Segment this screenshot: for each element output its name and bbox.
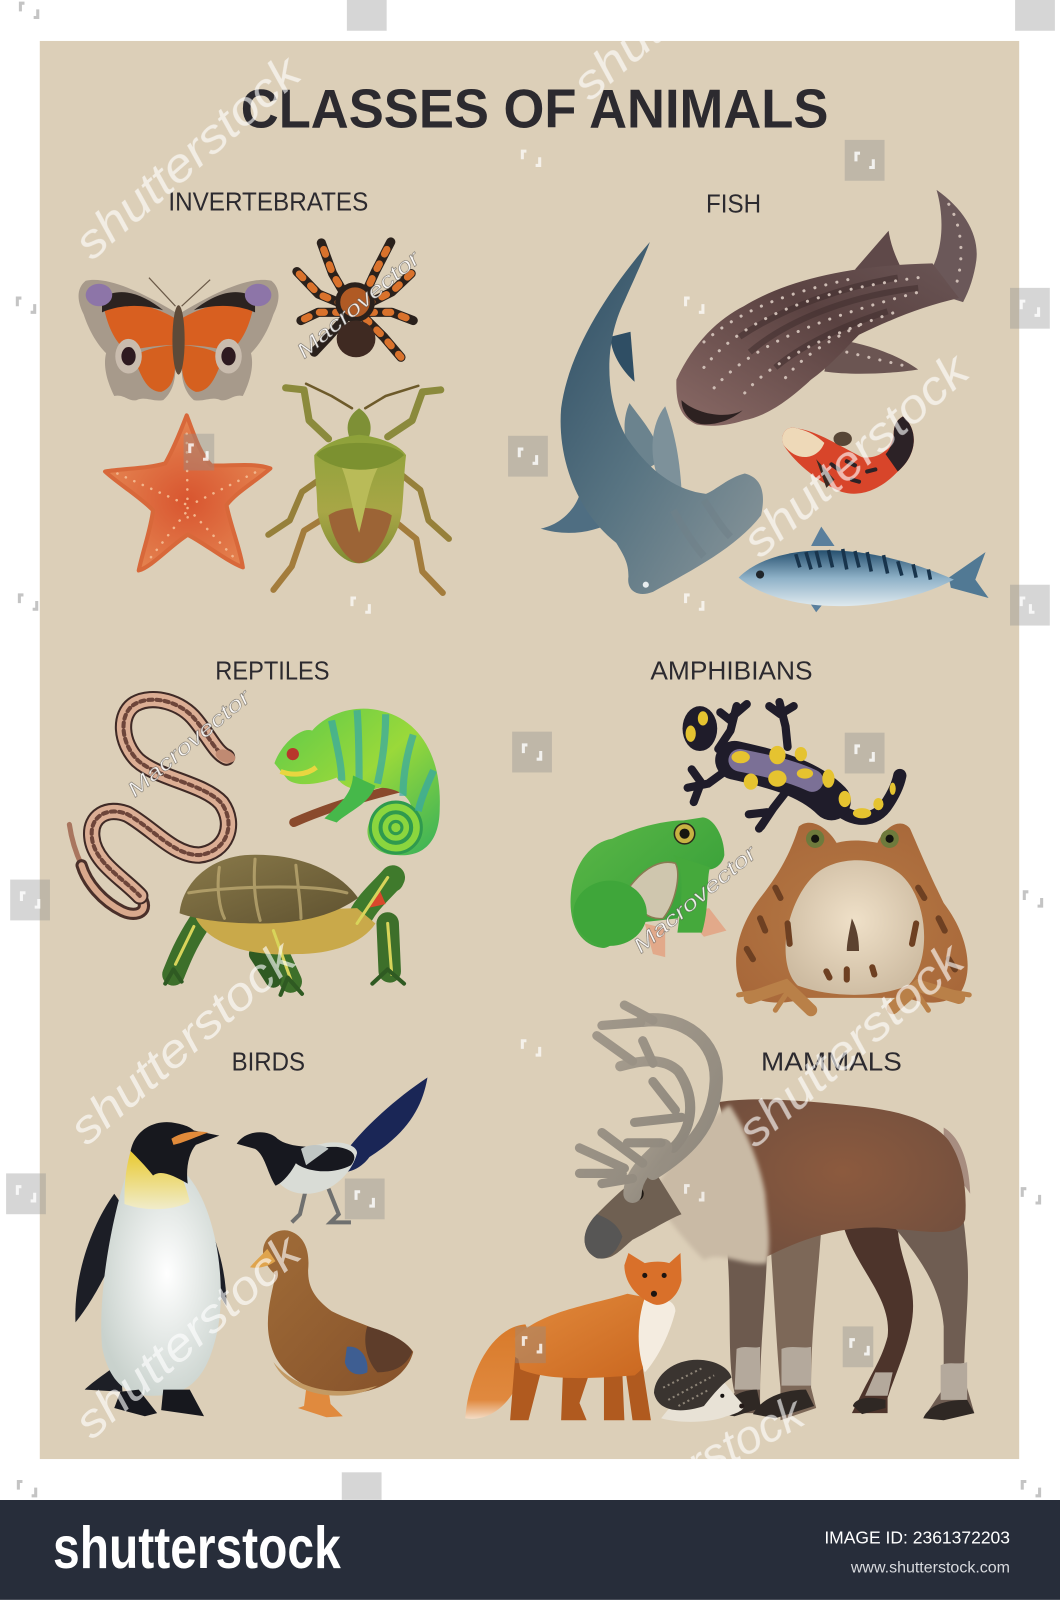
icon: tarantula <box>297 242 413 357</box>
front legs <box>719 1240 767 1413</box>
icon: koi fish <box>782 416 914 494</box>
heading: birds: BIRDS <box>232 1048 305 1076</box>
watermark: shutterstock diagonals: shutterstock <box>59 929 307 1154</box>
socks <box>735 1347 967 1400</box>
icon: butterfly <box>79 278 279 401</box>
icon: whale shark <box>676 190 977 426</box>
footer logo: shutterstock <box>53 1514 341 1581</box>
icon: mackerel <box>739 527 989 612</box>
heading: invertebrates: INVERTEBRATES <box>168 188 368 216</box>
icon: chameleon <box>274 709 440 855</box>
near rear leg <box>888 1173 974 1418</box>
watermark: macrovector diagonals: Macrovector <box>628 840 762 958</box>
footer image id: IMAGE ID: 2361372203 <box>824 1528 1010 1548</box>
watermark: shutterstock diagonals: shutterstock <box>727 931 975 1156</box>
watermark: macrovector diagonals: Macrovector <box>122 684 256 802</box>
icon: magpie <box>237 1077 427 1222</box>
icon: hedgehog <box>654 1360 744 1422</box>
watermark: shutterstock diagonals: shutterstock <box>733 342 980 567</box>
watermark: shutterstock diagonals: shutterstock <box>64 1223 312 1448</box>
antlers <box>579 1005 716 1194</box>
icon: turtle <box>165 855 404 995</box>
icon: starfish <box>105 415 270 570</box>
icon: hammerhead shark <box>541 242 763 594</box>
icon: fox <box>465 1253 682 1420</box>
watermark: macrovector diagonals <box>122 246 762 958</box>
far legs <box>842 1219 913 1413</box>
icon: duck <box>250 1230 413 1417</box>
icon: fire salamander <box>683 702 900 829</box>
icon: reindeer <box>579 1005 974 1420</box>
title: CLASSES OF ANIMALS <box>241 78 828 140</box>
heading: amphibians: AMPHIBIANS <box>650 658 813 686</box>
heading: mammals: MAMMALS <box>761 1048 902 1076</box>
footer bar <box>0 1500 1060 1600</box>
body <box>719 1099 966 1260</box>
watermark: shutterstock diagonals: shutterstock <box>64 44 312 269</box>
hooves <box>720 1390 974 1420</box>
icon: tree frog <box>571 817 726 957</box>
icon: penguin <box>75 1122 226 1416</box>
heading: fish: FISH <box>706 190 761 218</box>
watermark: shutterstock diagonals: terstock <box>643 1385 814 1509</box>
watermark: macrovector diagonals: Macrovector <box>292 246 425 363</box>
footer url: www.shutterstock.com <box>850 1559 1010 1576</box>
icon: toad <box>736 823 969 1010</box>
tail <box>944 1127 970 1194</box>
mane <box>653 1105 769 1264</box>
heading: reptiles: REPTILES <box>215 658 330 686</box>
head <box>585 1168 682 1259</box>
icon: snake <box>69 700 237 914</box>
icon: shield bug <box>268 384 449 593</box>
